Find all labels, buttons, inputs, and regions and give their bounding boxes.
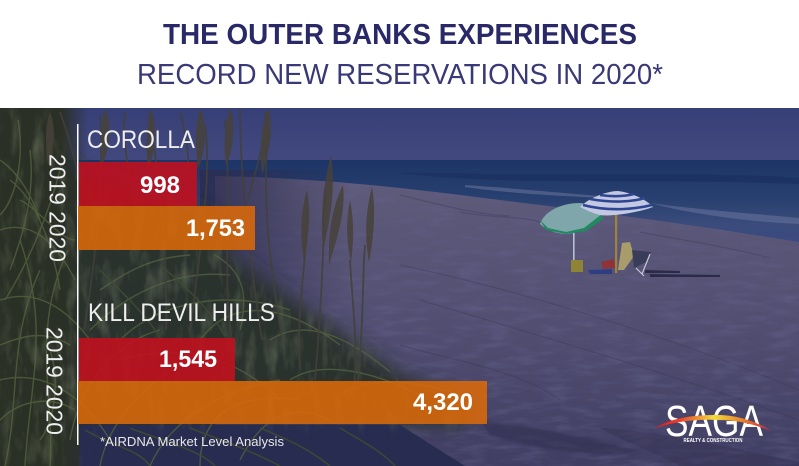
logo: SAGA Realty & Construction: REALTY & CONSTRUCTION [684,438,743,444]
value: 998: 998 [140,172,180,199]
chart: Kill Devil Hills [42,299,487,435]
title line 2: RECORD NEW RESERVATIONS IN 2020* [137,59,663,91]
title [137,19,663,91]
bar: Kill Devil Hills 2020 [78,381,487,424]
heading: Kill Devil Hills: KILL DEVIL HILLS [88,299,275,327]
chart: Corolla [44,126,255,262]
footnote: *AIRDNA Market Level Analysis [100,434,284,449]
value: 4,320: 4,320 [413,389,473,416]
title line 1: THE OUTER BANKS EXPERIENCES [163,19,637,51]
bar: Corolla 2020 [78,206,255,250]
year labels: Kill Devil Hills: 2019 2020 [42,327,68,435]
chart axis [77,124,78,445]
logo: SAGA Realty & Construction: SAGA [665,397,764,446]
value: 1,753: 1,753 [186,215,245,242]
beach umbrellas and chairs [540,191,720,277]
dune grass [0,108,480,466]
heading: Corolla: COROLLA [87,126,195,154]
bar: Kill Devil Hills 2019 [79,338,235,381]
year labels: Corolla: 2019 2020 [44,154,70,262]
beach photo background [0,108,799,466]
bar: Corolla 2019 [79,162,197,206]
value: 1,545: 1,545 [159,346,217,373]
